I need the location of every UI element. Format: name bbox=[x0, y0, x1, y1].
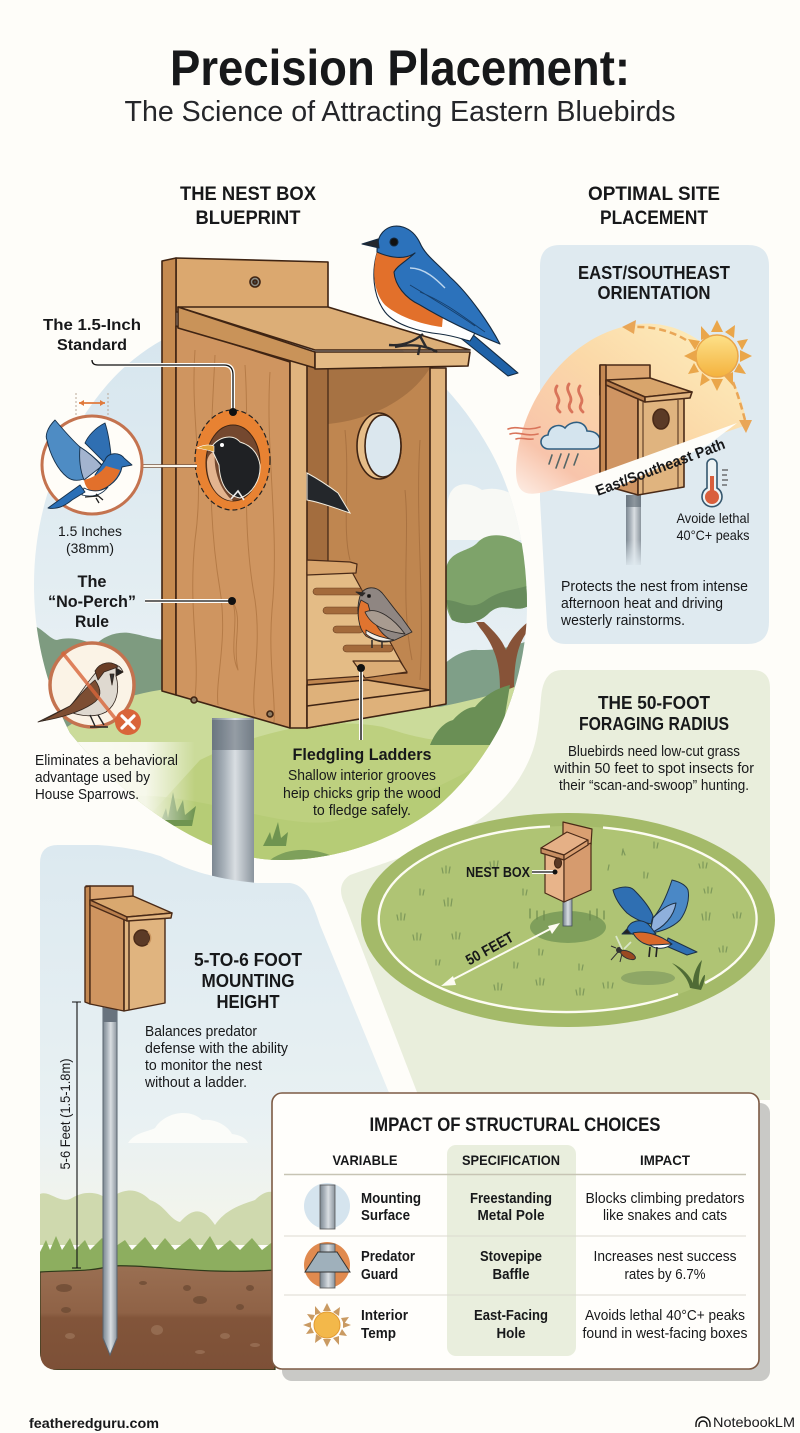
impact: like snakes and cats bbox=[603, 1208, 727, 1224]
orientation body text bbox=[560, 578, 748, 629]
heading: the nest box blueprint bbox=[180, 184, 316, 229]
fade bbox=[78, 742, 192, 820]
icon: insect bbox=[611, 936, 637, 962]
text: mounting body bbox=[144, 1024, 289, 1091]
variable: Predator bbox=[361, 1249, 415, 1265]
specification: Stovepipe bbox=[480, 1249, 542, 1265]
small nest box bbox=[600, 365, 692, 495]
caption: 1.5 inches: (38mm) bbox=[66, 540, 114, 556]
text: mounting body: to monitor the nest bbox=[145, 1058, 262, 1074]
icon: mini nest box bbox=[541, 822, 592, 902]
wood grain bbox=[193, 350, 274, 722]
table header: VARIABLE bbox=[332, 1152, 398, 1168]
specification: Metal Pole bbox=[478, 1208, 544, 1224]
label: no-perch rule: Rule bbox=[75, 612, 109, 631]
roof underside edge bbox=[178, 307, 315, 368]
caption: 1.5 inches bbox=[58, 523, 122, 556]
leader: nest box bbox=[532, 870, 558, 874]
icon: red x badge bbox=[115, 709, 141, 735]
leader: 1.5-inch standard bbox=[92, 360, 237, 416]
table card bbox=[272, 1093, 759, 1369]
icon: pole bbox=[304, 1183, 350, 1229]
cloud bbox=[128, 1113, 248, 1143]
variable: Surface bbox=[361, 1208, 410, 1224]
bottom ground band bbox=[132, 768, 474, 860]
icon: heat waves bbox=[508, 384, 583, 439]
side wall bbox=[176, 326, 290, 728]
interior floor bbox=[307, 680, 430, 728]
heading: the nest box blueprint: BLUEPRINT bbox=[196, 208, 301, 229]
heading: the nest box blueprint: THE NEST BOX bbox=[180, 184, 316, 205]
foraging body text: within 50 feet to spot insects for bbox=[553, 761, 754, 777]
orientation body text: westerly rainstorms. bbox=[560, 612, 685, 629]
heading: mounting height bbox=[194, 949, 303, 1012]
right hills bbox=[436, 642, 524, 744]
orientation heading: ORIENTATION bbox=[598, 283, 710, 303]
distant hills bbox=[40, 1191, 280, 1245]
specification: Baffle bbox=[492, 1267, 530, 1283]
tuft bbox=[672, 960, 705, 990]
text: no-perch body bbox=[35, 753, 178, 803]
impact bbox=[582, 1308, 748, 1342]
interior grain bbox=[345, 430, 421, 680]
grass bbox=[40, 1236, 272, 1272]
icon: baffle bbox=[304, 1242, 350, 1288]
text: fledgling body: Shallow interior grooves bbox=[288, 768, 436, 784]
label: fledgling ladders: Fledgling Ladders bbox=[292, 745, 432, 764]
variable bbox=[361, 1249, 415, 1283]
interior bbox=[307, 364, 432, 728]
icon: sun bbox=[684, 320, 752, 391]
title bbox=[124, 40, 676, 128]
label: no-perch rule bbox=[48, 572, 136, 631]
tree bbox=[444, 535, 530, 690]
arrow heads bbox=[622, 320, 752, 433]
panel: scene circle bbox=[30, 226, 530, 915]
soil bbox=[40, 1266, 275, 1370]
roof bbox=[178, 307, 470, 350]
caption: 1.5 inches: 1.5 Inches bbox=[58, 523, 122, 539]
table header: SPECIFICATION bbox=[462, 1152, 560, 1168]
variable: Guard bbox=[361, 1267, 398, 1283]
foraging body text: Bluebirds need low-cut grass bbox=[568, 744, 740, 760]
foraging heading bbox=[579, 693, 729, 734]
icon: entrance hole with black bird bbox=[195, 410, 270, 510]
back screw bbox=[250, 277, 260, 287]
specification bbox=[470, 1191, 552, 1224]
specification: East-Facing bbox=[474, 1308, 548, 1324]
panel: impact table bbox=[272, 1093, 770, 1381]
icon: fledgling chick bbox=[356, 588, 412, 648]
label: no-perch rule: The bbox=[78, 572, 106, 591]
table shadow bbox=[282, 1103, 770, 1381]
front post bbox=[290, 350, 307, 728]
orientation body text: Protects the nest from intense bbox=[561, 578, 748, 595]
height bracket bbox=[72, 1002, 81, 1268]
table header: IMPACT bbox=[640, 1152, 690, 1168]
icon: rain cloud bbox=[541, 422, 600, 468]
specification bbox=[474, 1308, 548, 1342]
thermometer caption: Avoide lethal bbox=[676, 510, 750, 526]
thermometer caption bbox=[676, 510, 750, 543]
icon: mounted nest box bbox=[85, 886, 172, 1011]
impact: rates by 6.7% bbox=[624, 1267, 706, 1283]
text: mounting body: defense with the ability bbox=[145, 1041, 289, 1057]
roof front bbox=[315, 352, 470, 369]
heading: optimal site placement: OPTIMAL SITE bbox=[588, 184, 720, 205]
icon: tall pole bbox=[103, 1005, 117, 1355]
icon: main pole bbox=[208, 718, 258, 915]
row: interior temp bbox=[303, 1303, 748, 1347]
label: 1.5-inch standard: The 1.5-Inch bbox=[43, 317, 141, 334]
left hills bbox=[36, 627, 162, 758]
icon: bluebird on roof bbox=[362, 226, 518, 376]
icon: sun bbox=[303, 1303, 351, 1347]
text: mounting body: without a ladder. bbox=[144, 1075, 247, 1091]
variable: Mounting bbox=[361, 1191, 421, 1207]
icon: thermometer bbox=[702, 459, 728, 507]
leader: no-perch bbox=[145, 597, 236, 605]
back plate bbox=[176, 258, 328, 312]
bush bbox=[430, 685, 510, 745]
cloud bbox=[446, 484, 521, 540]
foraging heading: FORAGING RADIUS bbox=[579, 714, 729, 734]
orientation heading: EAST/SOUTHEAST bbox=[578, 263, 730, 283]
text: mounting body: Balances predator bbox=[145, 1024, 257, 1040]
label: 1.5-inch standard bbox=[43, 317, 141, 354]
heading: optimal site placement bbox=[588, 184, 720, 229]
white ribbon bbox=[552, 423, 737, 495]
specification: Hole bbox=[496, 1326, 526, 1342]
foraging body text: their “scan-and-swoop” hunting. bbox=[559, 778, 749, 794]
text: fledgling body: to fledge safely. bbox=[313, 803, 411, 819]
icon: flying bluebird bbox=[613, 880, 697, 957]
text: no-perch body: House Sparrows. bbox=[35, 787, 139, 803]
panel: east/southeast orientation bbox=[508, 245, 769, 644]
text: no-perch body: Eliminates a behavioral bbox=[35, 753, 178, 769]
row: predator guard bbox=[304, 1242, 736, 1288]
text: no-perch body: advantage used by bbox=[35, 770, 151, 786]
sun glow wedge bbox=[516, 324, 747, 494]
specification: Freestanding bbox=[470, 1191, 552, 1207]
leader: ladder bbox=[357, 664, 365, 740]
dimension marker bbox=[76, 393, 108, 416]
icon: nest box bbox=[162, 258, 470, 728]
variable: Temp bbox=[361, 1326, 396, 1342]
meadow bbox=[361, 813, 775, 1027]
icon: fledgling ladder bbox=[307, 560, 407, 680]
heading: mounting height: HEIGHT bbox=[216, 991, 280, 1012]
foraging body text bbox=[553, 744, 754, 794]
ground bbox=[67, 686, 515, 860]
foraging heading: THE 50-FOOT bbox=[598, 693, 710, 713]
impact: found in west-facing boxes bbox=[582, 1326, 748, 1342]
footer: website: featheredguru.com bbox=[29, 1415, 159, 1431]
path label: East/Southeast Path bbox=[593, 436, 728, 500]
panel: mounting height bbox=[40, 845, 395, 1370]
heading: mounting height: 5-TO-6 FOOT bbox=[194, 949, 303, 970]
specification bbox=[480, 1249, 542, 1283]
label: 5-6 feet: 5-6 Feet (1.5-1.8m) bbox=[57, 1058, 73, 1170]
impact bbox=[586, 1191, 744, 1224]
interior hole bbox=[357, 413, 401, 479]
impact: Increases nest success bbox=[594, 1249, 736, 1265]
right post bbox=[430, 368, 446, 707]
table header bbox=[332, 1152, 690, 1168]
text: fledgling body: heip chicks grip the wood bbox=[283, 786, 441, 802]
orientation heading bbox=[578, 263, 730, 303]
small pole bbox=[622, 495, 646, 568]
impact: Blocks climbing predators bbox=[586, 1191, 744, 1207]
icon: bluebird size medallion bbox=[42, 416, 142, 514]
variable: Interior bbox=[361, 1308, 408, 1324]
variable bbox=[361, 1191, 421, 1224]
arrow: 50 feet radius bbox=[441, 923, 560, 986]
highlighted column bbox=[447, 1145, 576, 1356]
mini pole bbox=[563, 898, 572, 926]
thermometer caption: 40°C+ peaks bbox=[676, 527, 750, 543]
title: The Science of Attracting Eastern Bluebirds bbox=[124, 96, 676, 128]
grass marks bbox=[397, 842, 741, 995]
text: fledgling body bbox=[283, 768, 441, 819]
footer: notebooklm logo: NotebookLM bbox=[713, 1414, 795, 1430]
panel: foraging radius bbox=[341, 670, 775, 1100]
row: mounting surface bbox=[304, 1183, 744, 1229]
heading: optimal site placement: PLACEMENT bbox=[600, 208, 708, 229]
label: nest box: NEST BOX bbox=[466, 865, 530, 881]
table title: IMPACT OF STRUCTURAL CHOICES bbox=[370, 1115, 660, 1136]
heading: mounting height: MOUNTING bbox=[202, 970, 294, 991]
label: 50 feet: 50 FEET bbox=[463, 929, 517, 969]
interior wing tail bbox=[307, 473, 350, 513]
impact: Avoids lethal 40°C+ peaks bbox=[585, 1308, 745, 1324]
variable bbox=[361, 1308, 408, 1342]
icon: no-perch medallion bbox=[38, 643, 141, 735]
label: 1.5-inch standard: Standard bbox=[57, 337, 127, 354]
grass tufts bbox=[159, 792, 288, 846]
soil pebbles bbox=[56, 1281, 254, 1313]
arrow: sun path bbox=[632, 327, 745, 420]
connector line bbox=[141, 464, 197, 468]
label: no-perch rule: “No-Perch” bbox=[48, 592, 136, 611]
impact bbox=[594, 1249, 736, 1283]
title: Precision Placement: bbox=[170, 40, 630, 96]
orientation body text: afternoon heat and driving bbox=[561, 595, 723, 612]
